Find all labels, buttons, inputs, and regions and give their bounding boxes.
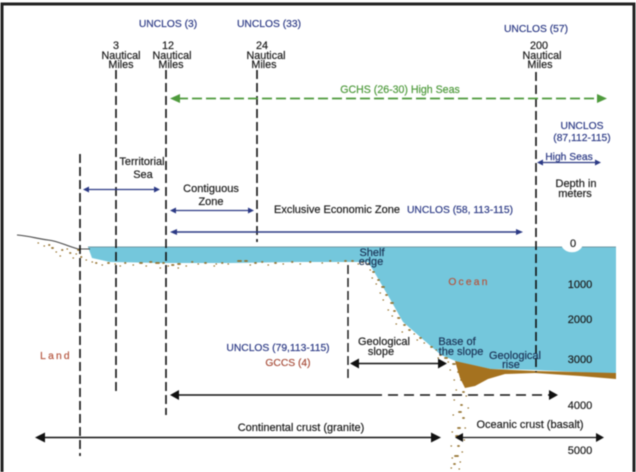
depth scale: 0: [570, 238, 576, 250]
base of the slope label: Base of: [438, 336, 477, 348]
unclos citation 3: UNCLOS (3): [139, 19, 197, 30]
ocean label: Ocean: [448, 277, 490, 288]
sea surface line: [88, 246, 616, 248]
land label: Land: [40, 351, 72, 362]
unclos 58 citation: UNCLOS (58, 113-115): [407, 205, 513, 216]
coastline: [17, 235, 90, 249]
label: 12 nautical miles: Nautical: [152, 50, 192, 62]
territorial sea arrow: [83, 186, 160, 192]
boundary line: 12 nautical miles: [165, 70, 167, 415]
shelf edge label: Shelf: [359, 247, 385, 259]
label: 24 nautical miles: Miles: [251, 59, 277, 71]
geological slope label: [358, 336, 410, 358]
depth scale: 4000: [568, 400, 592, 412]
base of the slope label: the slope: [439, 346, 483, 358]
unclos high seas citation: UNCLOS: [561, 121, 604, 132]
boundary line: shelf edge: [347, 265, 349, 378]
geological slope arrow: [350, 358, 447, 368]
gccs citation: GCCS (4): [265, 358, 311, 369]
depth scale: 2000: [568, 314, 592, 326]
label: 12 nautical miles: 12: [162, 40, 174, 52]
shelf edge label: [359, 247, 385, 268]
exclusive economic zone label: Exclusive Economic Zone: [274, 204, 400, 216]
label: 200 nautical miles: Nautical: [522, 50, 562, 62]
unclos citation 57: UNCLOS (57): [504, 24, 568, 35]
gchs label: GCHS (26-30) High Seas: [340, 84, 460, 96]
oceanic crust label: Oceanic crust (basalt): [477, 419, 583, 431]
high seas arrow: [537, 160, 601, 166]
label: 3 nautical miles: 3: [113, 40, 119, 52]
contiguous zone arrow: [170, 208, 254, 214]
depth scale: 3000: [568, 354, 592, 366]
contiguous zone label: Zone: [198, 196, 224, 208]
unclos high seas citation: [553, 121, 611, 144]
ocean water: [88, 247, 616, 374]
unclos high seas citation: (87,112-115): [553, 133, 611, 144]
territorial sea label: Sea: [133, 169, 154, 181]
boundary line: baseline: [79, 154, 81, 456]
depth scale: 1000: [568, 279, 592, 291]
contiguous zone label: [183, 183, 239, 208]
depth heading: [556, 178, 596, 200]
boundary line: 200 nautical miles: [535, 72, 537, 372]
boundary line: 3 nautical miles: [115, 70, 117, 395]
label: 12 nautical miles: [152, 40, 192, 71]
geological rise label: Geological: [489, 350, 541, 362]
label: 24 nautical miles: Nautical: [246, 50, 286, 62]
label: 200 nautical miles: 200: [530, 40, 548, 52]
high seas label: High Seas: [545, 152, 593, 163]
continental crust label: Continental crust (granite): [238, 422, 364, 434]
geological rise sediment: [455, 361, 616, 388]
sediment stipple: [38, 243, 468, 469]
geological slope label: Geological: [358, 336, 410, 348]
green high seas arrow: [170, 94, 607, 103]
boundary line: 24 nautical miles: [256, 70, 258, 242]
label: 3 nautical miles: [101, 40, 141, 71]
label: 200 nautical miles: Miles: [527, 59, 553, 71]
depth scale: 5000: [568, 445, 592, 457]
geological rise label: rise: [502, 359, 520, 371]
white notch behind depth zero: [562, 240, 582, 252]
contiguous zone label: Contiguous: [183, 183, 239, 195]
unclos 79 citation: UNCLOS (79,113-115): [226, 343, 330, 354]
depth scale: [568, 238, 592, 457]
continental margin arrow: [170, 390, 558, 400]
oceanic crust arrow: [455, 433, 604, 442]
depth heading: Depth in: [556, 178, 596, 190]
base of the slope label: [438, 336, 483, 358]
label: 24 nautical miles: [246, 40, 286, 71]
label: 24 nautical miles: 24: [256, 40, 268, 52]
territorial sea label: [119, 156, 165, 181]
depth heading: meters: [558, 188, 592, 200]
label: 200 nautical miles: [522, 40, 562, 71]
label: 3 nautical miles: Miles: [108, 59, 134, 71]
shelf edge label: edge: [359, 256, 383, 268]
continental crust arrow: [35, 432, 441, 442]
label: 12 nautical miles: Miles: [158, 59, 184, 71]
geological rise label: [489, 350, 541, 371]
exclusive economic zone arrow: [170, 229, 523, 235]
territorial sea label: Territorial: [119, 156, 165, 168]
geological slope label: slope: [368, 346, 394, 358]
unclos citation 33: UNCLOS (33): [237, 19, 301, 30]
label: 3 nautical miles: Nautical: [101, 50, 141, 62]
